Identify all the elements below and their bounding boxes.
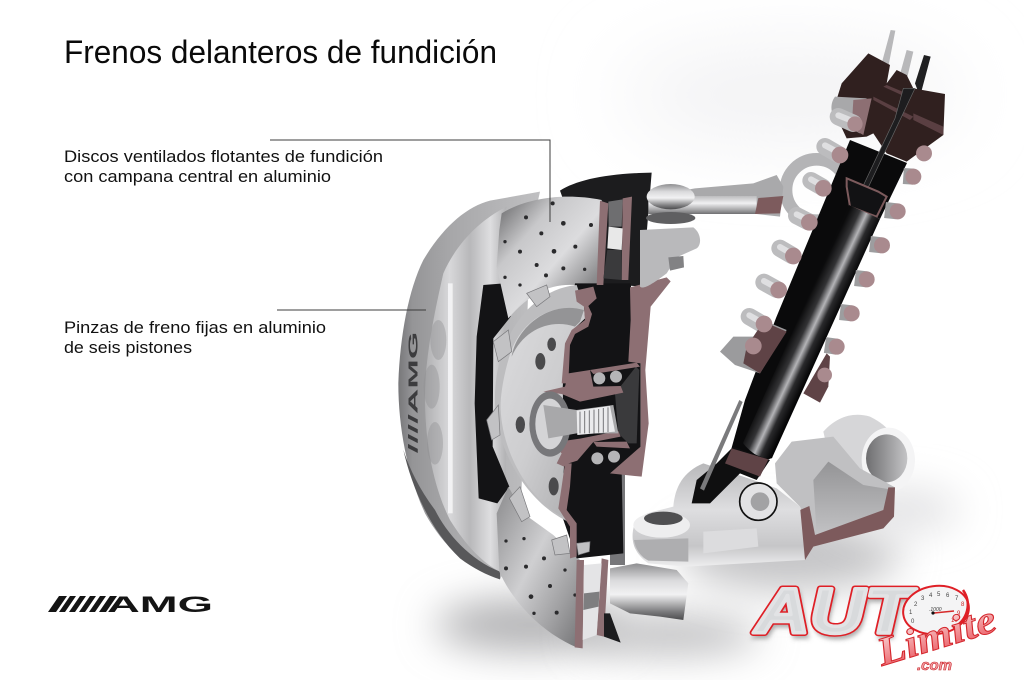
callout line: discos [270, 140, 550, 222]
arm ring [786, 159, 847, 221]
brake pad [475, 283, 511, 503]
coil highlights [749, 115, 850, 321]
callout line: pinzas [277, 309, 426, 311]
top mount [831, 30, 945, 217]
arm section [800, 487, 895, 560]
suspension strut [720, 30, 945, 475]
speedometer: 4 [929, 593, 933, 599]
hub interior dark [560, 283, 641, 558]
stud holes [516, 338, 559, 495]
callout text: discos [64, 148, 383, 186]
arm section [755, 196, 783, 214]
speedometer: 1 [909, 610, 913, 616]
far bushing ring [862, 428, 915, 492]
lower ball joint [610, 563, 688, 620]
rear bearing cover [615, 367, 639, 443]
callout text: discos: Discos ventilados flotantes de fundición [64, 148, 383, 166]
Auto Limite logo [753, 575, 1001, 675]
lower clamp [604, 613, 621, 643]
wheel hub section [543, 370, 623, 402]
ball joint [647, 184, 695, 209]
disc section strips [597, 197, 632, 285]
disc hat plate [495, 285, 585, 524]
spring left coils [720, 115, 932, 403]
upper control arm [640, 159, 847, 288]
coil ends right [817, 145, 932, 382]
Limite script: Limite [870, 596, 1001, 675]
speedometer: 5 [937, 592, 941, 598]
rear disc shield [560, 173, 652, 287]
lower control arm [610, 400, 915, 620]
spring right coils [825, 176, 913, 347]
speedometer [900, 582, 972, 638]
upper disc [497, 197, 602, 318]
speedometer: 6 [946, 593, 950, 599]
hat ring [512, 308, 584, 357]
drive shaft splines [529, 391, 618, 457]
speedometer: 3 [921, 596, 925, 602]
knuckle section [610, 277, 671, 477]
speedometer: 8 [961, 602, 965, 608]
callout text: pinzas: de seis pistones [64, 339, 192, 357]
damper tube [743, 205, 880, 459]
brake assembly [398, 173, 671, 648]
callout text: discos: con campana central en aluminio [64, 168, 331, 186]
lower damper mount [692, 447, 770, 503]
caliper piston bulges [424, 283, 453, 513]
speedometer: 2 [914, 602, 918, 608]
bolts [487, 285, 590, 555]
caliper body [398, 192, 540, 579]
caliper bright face [425, 207, 507, 572]
bearing balls [591, 371, 622, 464]
far bushing body [823, 415, 892, 473]
cross-drilled holes [503, 201, 593, 615]
speedometer: 9 [957, 611, 961, 617]
AMG logo: AMG [107, 592, 213, 617]
lower arm web [775, 437, 895, 537]
logo wordmark: AUT [753, 575, 917, 647]
hat section lining [562, 287, 597, 383]
lower knuckle strip [610, 470, 625, 565]
speedometer: 7 [955, 596, 959, 602]
speedometer: 10 [951, 618, 958, 624]
strut black body [724, 140, 907, 475]
arm main casting [633, 463, 805, 567]
speedometer: .1000 [929, 607, 942, 613]
callout text: pinzas [64, 319, 326, 357]
com text: .com [917, 657, 952, 674]
logo shadow: AUT [755, 579, 919, 651]
callout text: pinzas: Pinzas de freno fijas en aluminio [64, 319, 326, 337]
knuckle arm [640, 227, 700, 288]
upper spring pad right [803, 353, 830, 403]
arm beam [648, 175, 783, 217]
caliper AMG lettering: ////AMG [406, 332, 421, 453]
speedometer: 0 [911, 619, 915, 625]
pivot bolt [740, 483, 777, 520]
AMG logo [48, 592, 213, 617]
title: Frenos delanteros de fundición [64, 34, 497, 70]
logo red outline: AUT [753, 575, 917, 647]
coil ends left [745, 116, 863, 354]
lower disc [497, 487, 580, 647]
spring seat lower [720, 322, 787, 373]
caliper edge dark [403, 450, 500, 579]
soft shadows [435, 50, 960, 653]
